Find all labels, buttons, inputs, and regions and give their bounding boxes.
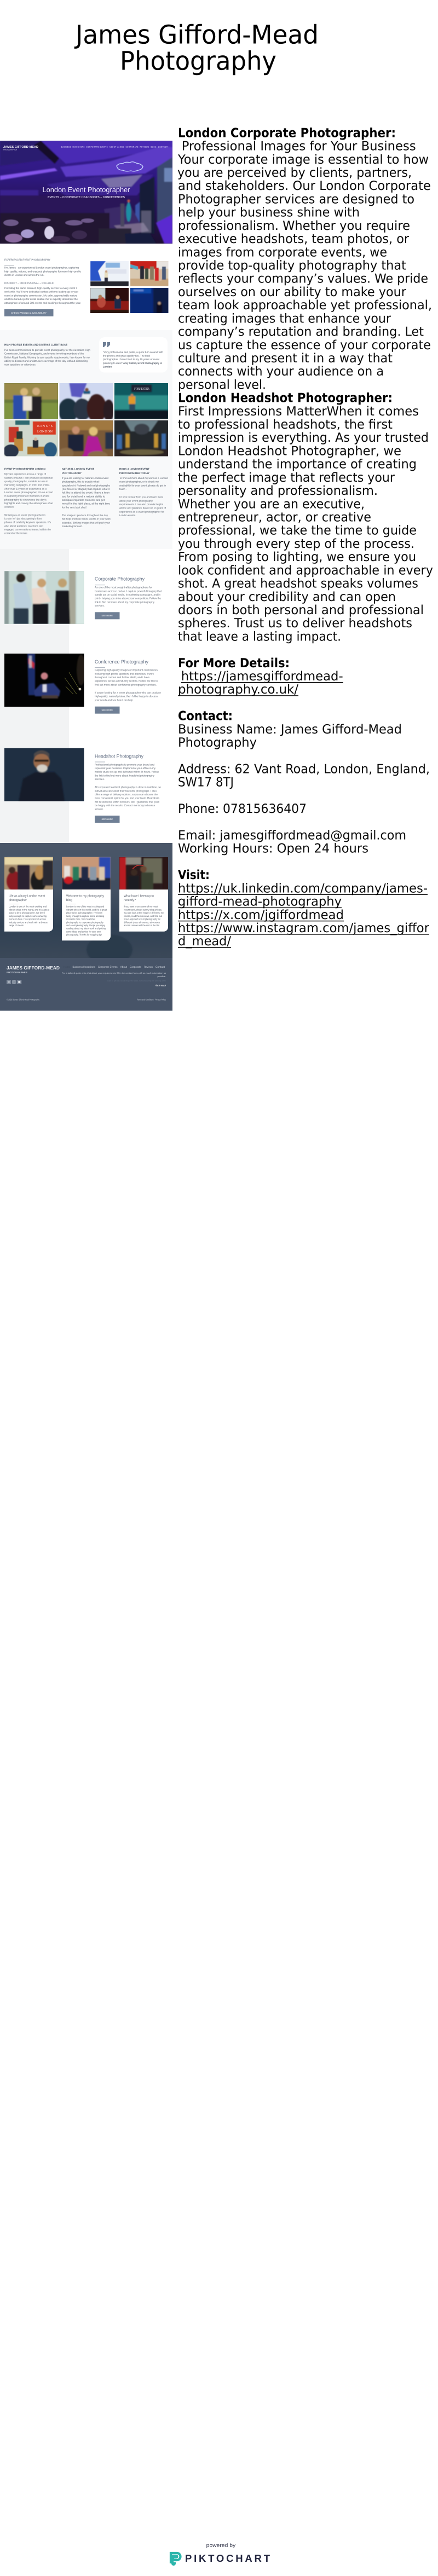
text block: visit links: https://uk.linkedin.com/company/james-: [178, 881, 428, 896]
blog card 3: recently?: [124, 898, 136, 902]
blog card 2: and event photography. I hope you enjoy: [66, 924, 106, 927]
photo grid: six event photos: KING'S: [37, 425, 53, 428]
intro text: DISCREET – PROFESSIONAL – RELIABLE: [4, 282, 54, 285]
corporate text: stands out on social media, in marketing campaigns, and in: [95, 593, 160, 597]
text block: london headshot photographer: spheres. Trust us to deliver headshots: [178, 616, 412, 631]
text block: london headshot photographer: London Headshot Photographer:: [178, 391, 393, 406]
corporate text: As one of the most sought-after photographers for: [95, 586, 152, 590]
testimonial card: "Very professional and polite, a quick turn around with: [103, 351, 163, 354]
corporate text: services.: [95, 604, 105, 608]
icon: quote marks: [103, 342, 110, 347]
column: natural london event photography: The images I produce throughout the day: [62, 514, 108, 517]
text block: contact: Contact:: [178, 709, 233, 724]
footer enquiry text: Terms and Conditions · Privacy Policy: [137, 998, 166, 1001]
button: check pricing: CHECK PRICING & AVAILABILITY: [11, 312, 47, 314]
column: event photographer london: in capturing important moments in event: [4, 495, 50, 498]
footer enquiry text: Get in touch: [155, 984, 166, 986]
high-profile text: ability to discreet and unobtrusive coverage of the day without distracting: [4, 360, 88, 363]
column: book a london event photographer: BOOK A LONDON EVENT: [119, 468, 150, 471]
text block: contact: Phone: 07815636407: [178, 802, 307, 816]
headshot text: most convenient option for you and your team. Headshots: [95, 797, 160, 800]
section: high-profile events on pale background: [0, 330, 172, 549]
text block: london corporate photographer: and stakeholders. Our London Corporate: [178, 179, 431, 193]
text block: contact: Working Hours: Open 24 hours: [178, 842, 368, 856]
text block: for more details: For More Details:: [178, 656, 290, 671]
button: see more: [95, 612, 119, 619]
blog card 1: [4, 857, 53, 932]
footer enquiry text: © 2025 James Gifford-Mead Photography: [7, 998, 39, 1001]
blog card 1: moments here. I've experienced across: [9, 918, 47, 921]
text block: london corporate photographer: reflects your company’s values. We pride: [178, 272, 428, 286]
text block: london headshot photographer: about your credibility and can open: [178, 590, 396, 604]
footer logo: PHOTOGRAPHER: [7, 971, 28, 974]
text block: london corporate photographer: connects with your audience on a: [178, 365, 384, 379]
blog card 2: lucky enough to capture some amazing: [66, 915, 104, 917]
blog card 2: London is one of the most exciting and: [66, 905, 104, 908]
column: natural london event photography: eye for detail and a natural ability to: [62, 495, 105, 498]
footer navigation: About: [120, 966, 128, 969]
text block: london corporate photographer: company’s reputation and branding. Let: [178, 325, 424, 339]
conference text: high-quality, natural photos, then I'd be happy to discuss: [95, 695, 158, 698]
headshot text: Headshot Photography: [95, 754, 143, 759]
blog card 2: photography to corporate photography: [66, 921, 104, 923]
column: natural london event photography: myself in the right place, at the right time: [62, 503, 110, 506]
text block: london corporate photographer: provide top-quality photography that: [178, 258, 406, 273]
column: natural london event photography: marketing forward.: [62, 525, 83, 528]
text block: visit links: https://www.instagram.com/james_giffor: [178, 921, 430, 935]
column: event photographer london: also about audience reactions and: [4, 524, 43, 528]
footer logo: [7, 965, 60, 974]
three text columns: [4, 468, 168, 535]
footer navigation: Contact: [155, 966, 165, 969]
powered by piktochart badge: PIKTOCHART: [185, 2552, 270, 2564]
high-profile text: HIGH-PROFILE EVENTS AND DIVERSE CLIENT-BASE: [4, 344, 67, 347]
footer enquiry text: [7, 972, 166, 1001]
text block: london headshot photographer: impression is everything. As your trusted: [178, 431, 429, 445]
footer logo: JAMES GIFFORD-MEAD: [7, 965, 60, 971]
blog card 1: industry sectors and work with a diverse: [9, 921, 48, 923]
column: book a london event photographer: advice and guidance based on 13 years of: [119, 507, 166, 510]
column: book a london event photographer: [119, 468, 168, 517]
blog card 3: clients, read their reviews, and find out: [124, 915, 163, 917]
column: book a london event photographer: experience as a event photographer for: [119, 510, 164, 513]
button: see more: [95, 707, 119, 714]
testimonial card: Amy Aldred, Event Photography in: [123, 362, 162, 365]
text block: contact: [178, 709, 430, 856]
hero text: EVENTS – CORPORATE HEADSHOTS – CONFERENCES: [48, 196, 125, 198]
intro text: Providing the same discreet, high-quality service to every client I: [4, 287, 77, 290]
conference text: experience across all industry sectors. Follow the link to: [95, 680, 158, 683]
corporate text: Corporate Photography: [95, 576, 145, 582]
button: see more: [95, 816, 119, 823]
column: event photographer london: London event photographer, I'm an expert: [4, 491, 54, 494]
photo: headshot of man with glasses: [4, 748, 84, 801]
headshot text: be happy with the results. Contact me today to book a: [95, 804, 155, 807]
icons: social squares: [7, 980, 21, 984]
column: natural london event photography: for the very best shot!: [62, 506, 87, 509]
text block: london headshot photographer: London Headshot Photographer, we: [178, 444, 401, 458]
blog card 3: recent work, check out my blog articles.: [124, 908, 162, 911]
title: James Gifford-Mead: [74, 20, 319, 50]
footer enquiry text: I aim to get back to all enquiries within 24 hours during the working week: [107, 979, 166, 982]
column: event photographer london: My vast experience across a range of: [4, 473, 47, 476]
footer navigation: Reviews: [144, 966, 153, 969]
text block: london headshot photographer: shot. A great headshot speaks volumes: [178, 577, 418, 591]
blog card 2: place to be a photographer. I've been: [66, 911, 102, 914]
high-profile text: Commission, National Geographic, and events involving members of the: [4, 353, 84, 356]
column: book a london event photographer: event photographer, or to check my: [119, 481, 159, 484]
hero text: JAMES GIFFORD-MEAD: [3, 146, 38, 149]
headshot text: session.: [95, 808, 103, 811]
column: natural london event photography: PHOTOGRAPHY: [62, 472, 82, 475]
service: headshot photography: [4, 748, 161, 823]
text block: london headshot photographer: you through every step of the process.: [178, 537, 414, 551]
hero text: BUSINESS HEADSHOTS CORPORATE EVENTS ABOUT JAMES CORPORATE REVIEWS BLOG CONTACT: [61, 146, 168, 148]
text block: london corporate photographer: creating images that enhance your: [178, 311, 391, 326]
column: natural london event photography: [62, 468, 111, 528]
title: [74, 20, 319, 76]
blog card 2: vibrant cities in the world, and it's a great: [66, 908, 107, 911]
text block: london corporate photographer: Photographer services are designed to: [178, 193, 414, 207]
text block: london headshot photographer: doors in both personal and professional: [178, 603, 424, 617]
photo grid: four event photos: [90, 261, 169, 313]
conference text: Conference Photography: [95, 659, 148, 665]
column: event photographer london: EVENT PHOTOGRAPHER LONDON: [4, 468, 45, 471]
hero text: London Event Photographer: [43, 186, 130, 194]
high-profile text: [4, 344, 90, 367]
text block: london headshot photographer: the perfect image that reflects your: [178, 471, 395, 485]
text block: contact: Address: 62 Vant Road, London, England,: [178, 762, 430, 776]
intro text: [4, 259, 81, 305]
photo grid: six event photos: LONDON: [37, 430, 53, 434]
intro text: and fine-tuned eye for detail enable me to expertly document the: [4, 298, 78, 301]
text block: london corporate photographer: us capture the essence of your corporate: [178, 338, 431, 353]
high-profile text: British Royal Family. Working to your specific requirements, I am known for my: [4, 356, 90, 359]
hero text: [3, 146, 168, 198]
text block: for more details: [178, 656, 343, 697]
column: event photographer london: context of the venue.: [4, 532, 28, 535]
text block: visit links: [178, 868, 430, 949]
icon: piktochart logo: [171, 2553, 181, 2565]
title: Photography: [120, 46, 276, 76]
text block: london headshot photographer: to professional headshots, the first: [178, 418, 393, 432]
text block: visit links: https://x.com/jgiffordmead: [178, 908, 344, 922]
blog card 3: across London and the rest of the UK.: [124, 924, 160, 927]
corporate text: [95, 576, 162, 608]
text block: london corporate photographer: [177, 126, 432, 392]
intro text: high quality, natural, and unposed photographs for many high-profile: [4, 270, 81, 273]
column: event photographer london: highlights and convey the atmosphere of an: [4, 502, 53, 505]
column: event photographer london: Working as an event photographer in: [4, 513, 45, 517]
column: event photographer london: sectors ensures I can produce exceptional: [4, 476, 53, 480]
blog card 2: photography. Thanks for stopping by!: [66, 933, 102, 936]
column: book a london event photographer: about your event photography: [119, 499, 153, 503]
text block: london headshot photographer: From posing to lighting, we ensure you: [178, 550, 416, 564]
blog card 3: If you want to see some of my most: [124, 905, 158, 908]
text block: london headshot photographer: personality and professionalism.: [178, 484, 378, 498]
text block: london headshot photographer: Whether you are an executive,: [178, 497, 365, 511]
text block: visit links: d_mead/: [178, 934, 231, 949]
text block: london corporate photographer: ourselves on our ability to make your: [178, 285, 407, 299]
text block: visit links: gifford-mead-photography: [178, 895, 342, 909]
column: event photographer london: After over 13 years of experience as a: [4, 487, 47, 490]
column: event photographer london: photos of celebrity keynote speakers. It's: [4, 521, 51, 524]
column: natural london event photography: calendar. Striking images that will push your: [62, 521, 110, 524]
blog card 1: Life as a busy London event: [9, 894, 45, 898]
column: natural london event photography: will help promote future events in your work: [62, 518, 111, 521]
text block: london headshot photographer: professional, we take the time to guide: [178, 524, 417, 538]
blog card 2: reading about my latest work and getting: [66, 927, 106, 930]
headshot text: the link to find out more about headshot photography: [95, 774, 155, 777]
headshot text: represent your business. Captured at your office in my: [95, 767, 156, 770]
column: book a london event photographer: touch .: [119, 488, 126, 491]
text block: london headshot photographer: [178, 391, 433, 644]
blog card 1: photographer: [9, 898, 27, 902]
blog card 1: London is one of the most exciting and: [9, 905, 47, 908]
text block: london corporate photographer: executive headshots, team photos, or: [178, 232, 410, 246]
service: conference photography: [4, 654, 161, 714]
intro text: I'm James - an experienced London event photographer, capturing: [4, 267, 79, 270]
column: natural london event photography: specialise in! Relaxed and real photographs: [62, 484, 111, 487]
text block: london headshot photographer: understand the importance of creating: [178, 458, 417, 472]
text block: contact: SW17 8TJ: [178, 776, 234, 790]
blog card 2: [62, 857, 111, 940]
corporate text: businesses across London, I capture powerful imagery that: [95, 590, 162, 593]
button: see more: SEE MORE: [102, 709, 113, 712]
column: natural london event photography: If you are looking for natural London event: [62, 477, 109, 480]
blog card 3: What have I been up to: [124, 894, 154, 898]
text block: london corporate photographer: personal level.: [178, 378, 266, 392]
intro text: EXPERIENCED EVENT PHOTOGRAPHY: [4, 259, 50, 262]
text block: london headshot photographer: entrepreneur, actor, or creative: [178, 510, 371, 524]
photo grid: six event photos: [3, 383, 168, 460]
blog card 1: range of clients.: [9, 924, 24, 927]
high-profile text: your speakers or attendees.: [4, 363, 36, 367]
text block: visit links: Visit:: [178, 868, 210, 882]
section: services: [0, 549, 162, 843]
headshot text: offer a range of delivery options, so you can choose the: [95, 793, 158, 796]
text block: london corporate photographer: culture and present it in a way that: [178, 351, 393, 366]
text block: contact: Business Name: James Gifford-Mead: [178, 723, 402, 737]
footer enquiry text: For a tailored quote or to chat about your requirements, fill in the contact form with as much information as: [62, 972, 166, 974]
column: event photographer london: photography to showcase the day's: [4, 498, 47, 501]
column: natural london event photography: photography, this is exactly what I: [62, 481, 100, 484]
column: natural london event photography: (not forced or staged) that capture what it: [62, 488, 110, 491]
blog card 3: You can look at the images I deliver to my: [124, 911, 164, 914]
text block: for more details: https://jamesgiffordmead-: [181, 669, 343, 684]
column: event photographer london: [4, 468, 54, 535]
footer enquiry text: possible.: [158, 975, 166, 978]
blog card 2: some ideas and advice for your own: [66, 930, 101, 933]
text block: london headshot photographer: look confident and approachable in every: [178, 563, 433, 577]
hero text: PHOTOGRAPHER: [3, 149, 17, 151]
testimonial card: photographer I have hired in my 10 years of event: [103, 358, 160, 361]
text block: london corporate photographer: professionalism. Whether you require: [178, 219, 410, 233]
corporate text: print - helping you shine above your competitors. Follow the: [95, 597, 161, 600]
headshot text: [95, 754, 161, 811]
column: event photographer london: engaged conversations framed within the: [4, 528, 51, 532]
footer navigation: Business Headshots: [72, 966, 95, 969]
conference text: [95, 659, 161, 702]
blog card 1: lucky enough to capture some amazing: [9, 915, 47, 917]
footer of website: [0, 958, 172, 1010]
headshot text: will be delivered within 48 hours, and I guarantee that you'll: [95, 800, 159, 804]
column: event photographer london: London isn't just about getting brilliant: [4, 517, 42, 521]
powered by piktochart badge: powered by: [206, 2543, 235, 2549]
headshot text: individuals can select their favourite photograph. I also: [95, 789, 157, 793]
blog card 1: place to be a photographer. I've been: [9, 911, 45, 914]
column: book a london event photographer: To find out more about my work as a London: [119, 477, 168, 480]
testimonial card: the photos and great quality too. The best: [103, 355, 151, 358]
text block: london corporate photographer: team look approachable yet professional,: [178, 298, 432, 313]
text block: london headshot photographer: First Impressions MatterWhen it comes: [178, 405, 419, 419]
text block: london corporate photographer: Professional Images for Your Business: [182, 140, 416, 154]
intro text: atmosphere of around 200 events and bookings throughout the year.: [4, 302, 81, 305]
testimonial card: planning to date!": [103, 362, 123, 365]
text block: london corporate photographer: images from corporate events, we: [178, 245, 387, 259]
column: event photographer london: marketing campaigns, in print, and online.: [4, 484, 50, 487]
testimonial card: London: [103, 366, 112, 369]
powered by piktochart badge: [171, 2543, 270, 2565]
text block: london corporate photographer: help your business shine with: [178, 206, 360, 220]
photo: speaker in the dark with flag: [4, 654, 84, 707]
blog card 3: how I approach event photography for: [124, 918, 160, 921]
text block: london corporate photographer: Your corporate image is essential to how: [177, 153, 429, 167]
column: book a london event photographer: London events.: [119, 514, 136, 517]
hero banner: [0, 141, 172, 244]
headshot text: services.: [95, 778, 105, 781]
column: event photographer london: quality photographs, suitable for use in: [4, 480, 48, 483]
headshot text: Professional photographs to promote your brand and: [95, 763, 154, 766]
footer navigation: Corporate: [130, 966, 141, 969]
panel: website screenshot: [0, 141, 172, 1010]
conference text: including high-profile speakers and attendees. I work: [95, 672, 154, 675]
section: dark blog band: [0, 843, 172, 965]
section: experienced event photography: [0, 244, 172, 330]
footer navigation: Corporate Events: [98, 966, 118, 969]
column: natural london event photography: felt like to attend the event. I have a keen: [62, 492, 110, 495]
footer navigation: [64, 966, 165, 969]
intro text: event or photography commission. My calm, approachable nature: [4, 294, 77, 297]
column: event photographer london: occasion.: [4, 506, 14, 509]
intro text: work with. You'll have dedicated contact with me leading up to your: [4, 291, 78, 294]
headshot text: mobile studio set-up and delivered within 48 hours. Follow: [95, 771, 159, 774]
photo grid: six event photos: FORRESTER: [134, 388, 149, 391]
conference text: If you're looking for a event photographer who can produce: [95, 691, 161, 695]
blog card 2: blog: [66, 898, 72, 902]
blog card 3: [119, 857, 168, 932]
column: book a london event photographer: PHOTOGRAPHER TODAY: [119, 472, 149, 475]
button: see more: SEE MORE: [102, 818, 113, 821]
blog card 1: vibrant cities in the world, and it's a great: [9, 908, 50, 911]
conference text: your needs and see how I can help.: [95, 698, 134, 702]
column: book a london event photographer: availability for your event, please do get in: [119, 484, 166, 487]
conference text: throughout London and further afield, and I have: [95, 676, 149, 679]
button: check pricing: [4, 309, 54, 316]
text block: contact: Email: jamesgiffordmead@gmail.com: [178, 829, 406, 843]
conference text: Capturing high-quality images of important conferences: [95, 669, 158, 672]
photo: three colleagues talking: [4, 571, 84, 624]
blog card 3: different types of events, at venues: [124, 921, 160, 923]
footer navigation: Home: [64, 966, 70, 969]
text block: london corporate photographer: London Corporate Photographer:: [178, 126, 396, 140]
blog card 2: Welcome to my photography: [66, 894, 104, 898]
button: see more: SEE MORE: [102, 615, 113, 617]
column: book a london event photographer: I'd love to hear from you and learn more: [119, 496, 163, 499]
column: natural london event photography: anticipate important moments and get: [62, 499, 105, 502]
text block: for more details: photography.co.uk/: [178, 683, 298, 697]
column: natural london event photography: NATURAL LONDON EVENT: [62, 468, 95, 471]
headshot text: All corporate headshot photography is done in real time, so: [95, 786, 161, 789]
text block: london corporate photographer: you are perceived by clients, partners,: [177, 166, 412, 180]
conference text: find out more about conference photography services.: [95, 683, 157, 686]
blog card 2: moments here, from headshot: [66, 918, 96, 921]
high-profile text: I've been commissioned to provide event photography for the Australian High: [4, 349, 90, 352]
service: corporate photography: [4, 571, 162, 624]
text block: london headshot photographer: that leave a lasting impact.: [178, 629, 341, 644]
corporate text: link to find out more about my corporate photography: [95, 600, 155, 604]
testimonial card: [99, 337, 168, 372]
intro text: clients in London and across the UK.: [4, 274, 44, 277]
column: book a london event photographer: requirements. I can also provide helpful: [119, 503, 163, 506]
text block: contact: Photography: [178, 736, 257, 750]
